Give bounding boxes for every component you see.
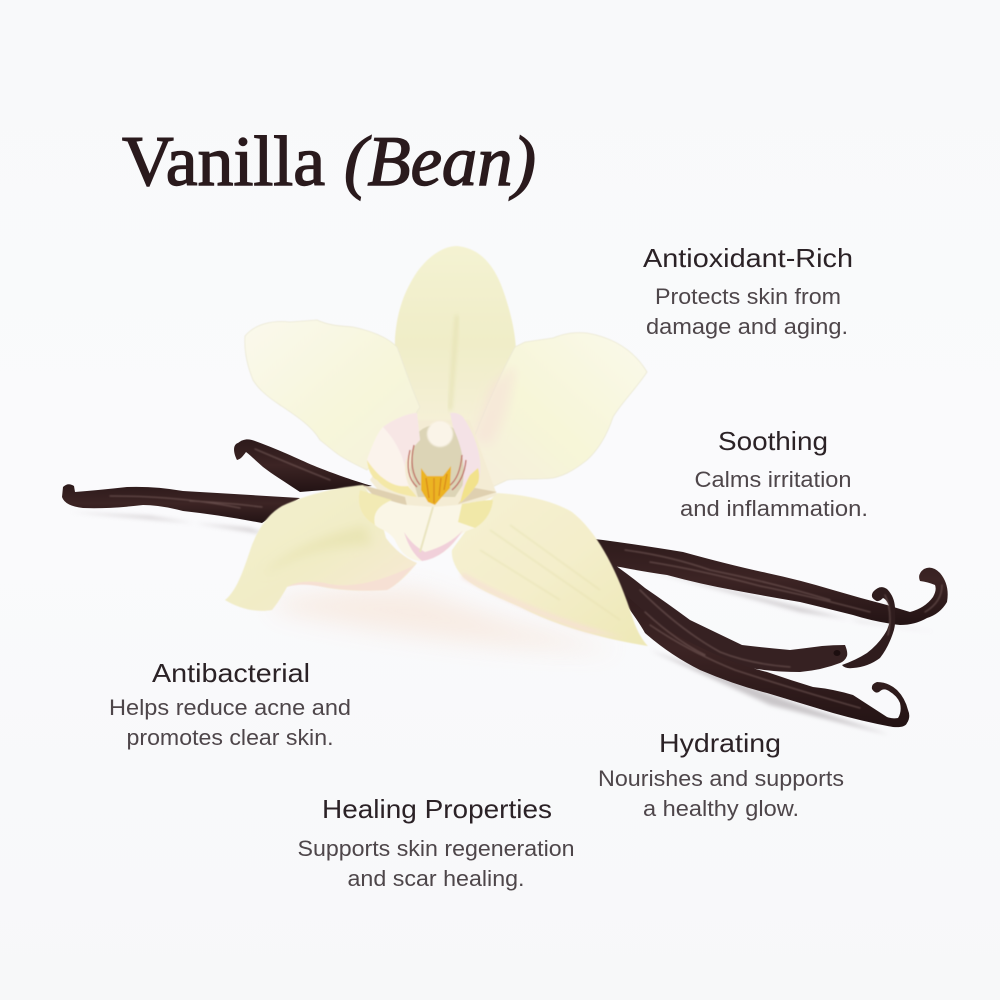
benefit: Soothing: Calms irritation	[694, 467, 852, 492]
bean highlights	[110, 449, 942, 708]
vanilla beans	[62, 439, 948, 727]
bean: lower with hook	[600, 570, 909, 727]
benefit: Hydrating: Nourishes and supports	[598, 766, 844, 791]
benefit: Hydrating	[598, 728, 844, 821]
flower stamen	[421, 466, 451, 505]
bean: curly tip	[842, 587, 895, 668]
benefit: Antibacterial: Helps reduce acne and	[109, 695, 351, 720]
benefit: Antibacterial: promotes clear skin.	[126, 725, 334, 750]
petal: top	[395, 246, 516, 440]
title	[122, 123, 536, 201]
petal: left	[245, 320, 420, 470]
title: Vanilla	[122, 123, 325, 201]
benefit: Soothing: Soothing	[718, 426, 828, 456]
bean: far left	[62, 484, 300, 523]
petal: right	[469, 333, 647, 493]
flower column	[363, 413, 497, 520]
benefit: Healing Properties	[298, 794, 574, 891]
benefit: Healing Properties: and scar healing.	[348, 866, 524, 891]
benefit: Antioxidant-Rich: Antioxidant-Rich	[643, 243, 853, 273]
benefit: Soothing: and inflammation.	[680, 496, 868, 521]
benefit: Antibacterial: Antibacterial	[152, 658, 310, 688]
benefit: Hydrating: Hydrating	[659, 728, 781, 758]
vanilla flower	[225, 246, 648, 646]
flower lip	[359, 490, 493, 561]
bean: upper left and right	[234, 439, 948, 625]
benefit: Antioxidant-Rich: Protects skin from	[655, 284, 841, 309]
bean: middle blunt end	[600, 555, 847, 672]
title: (Bean)	[344, 123, 536, 201]
benefit: Antioxidant-Rich	[643, 243, 853, 339]
benefit: Healing Properties: Supports skin regeneration	[298, 836, 574, 861]
benefit: Antioxidant-Rich: damage and aging.	[646, 314, 848, 339]
petal: bottom left	[225, 485, 417, 611]
benefit: Hydrating: a healthy glow.	[643, 796, 799, 821]
petal: bottom right	[452, 493, 648, 646]
benefit: Soothing	[680, 426, 868, 521]
cast shadows	[70, 512, 935, 735]
benefit: Antibacterial	[109, 658, 351, 750]
benefit: Healing Properties: Healing Properties	[322, 794, 552, 824]
